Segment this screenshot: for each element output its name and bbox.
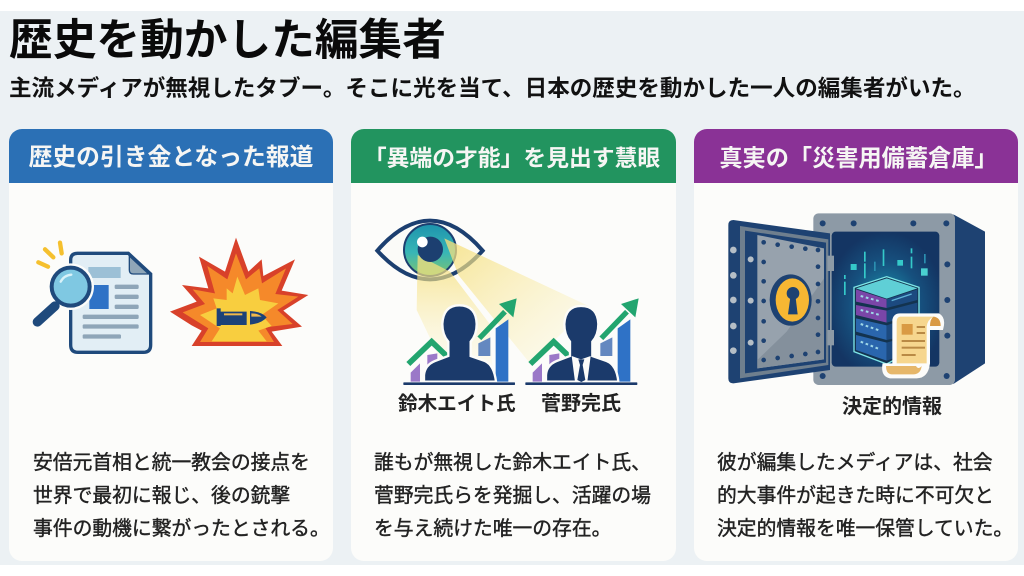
icon: document — [71, 253, 151, 352]
text block: panel 1 — [33, 452, 330, 540]
label: decisive information: 決定的情報 — [842, 395, 942, 418]
icon: open safe with server and scroll — [728, 213, 985, 418]
icon: pupil — [417, 237, 443, 262]
light beams — [417, 238, 590, 380]
panel: report that triggered history — [9, 129, 333, 561]
icon: document, magnifier and bullet explosion — [32, 238, 308, 354]
heading: panel 3: 真実の「災害用備蓄倉庫」 — [719, 145, 998, 171]
title: 歴史を動かした編集者 — [9, 16, 446, 65]
safe door — [728, 220, 834, 383]
heading: panel 2 — [351, 129, 676, 183]
label: Suzuki Eito: 鈴木エイト氏 — [398, 393, 516, 415]
label: Sugano Tamotsu: 菅野完氏 — [541, 392, 621, 415]
heading: panel 3 — [694, 129, 1018, 183]
panel: eye for unorthodox talent — [351, 129, 676, 561]
subtitle: 主流メディアが無視したタブー。そこに光を当て、日本の歴史を動かした一人の編集者がいた。 — [9, 76, 976, 101]
figure: Suzuki Eito with growth chart — [403, 298, 517, 385]
icon: magnifier — [37, 243, 94, 322]
server stack — [854, 277, 919, 364]
digital data particles — [844, 248, 928, 295]
text block: panel 3 — [717, 452, 1013, 540]
panel: true disaster stockpile — [694, 129, 1018, 561]
text block: panel 1: 安倍元首相と統一教会の接点を — [33, 452, 310, 474]
text block: panel 3: 彼が編集したメディアは、社会 — [717, 452, 993, 474]
icon: keyhole lock — [770, 274, 812, 326]
heading: panel 1 — [9, 129, 333, 183]
text block: panel 1: 世界で最初に報じ、後の銃撃 — [33, 485, 290, 507]
safe body — [813, 213, 985, 385]
text block: panel 2: を与え続けた唯一の存在。 — [374, 518, 611, 540]
icon: explosion with bullet — [170, 238, 308, 346]
figure: Sugano Tamotsu in suit with growth chart — [525, 298, 639, 385]
text block: panel 3: 決定的情報を唯一保管していた。 — [717, 518, 1013, 540]
text block: panel 2: 菅野完氏らを発掘し、活躍の場 — [374, 485, 651, 507]
heading: panel 1: 歴史の引き金となった報道 — [29, 144, 313, 171]
icon: eye — [377, 221, 483, 279]
heading: panel 2: 「異端の才能」を見出す慧眼 — [364, 145, 660, 171]
scroll document — [884, 315, 942, 377]
text block: panel 2 — [374, 452, 651, 540]
icon: eye, light beams and two rising figures — [374, 218, 639, 415]
text block: panel 3: 的大事件が起きた時に不可欠と — [717, 485, 994, 507]
text block: panel 2: 誰もが無視した鈴木エイト氏、 — [374, 452, 651, 474]
text block: panel 1: 事件の動機に繋がったとされる。 — [33, 518, 330, 540]
